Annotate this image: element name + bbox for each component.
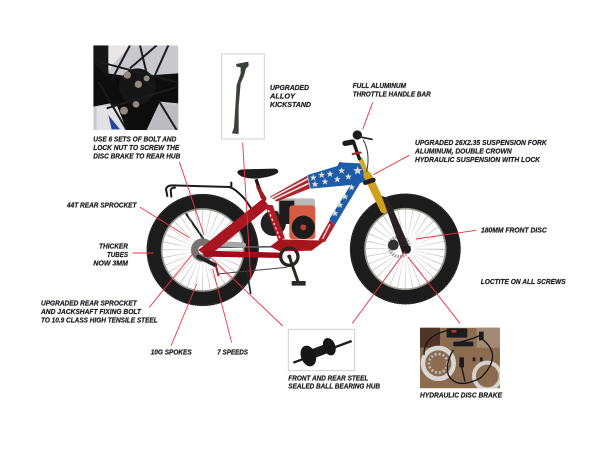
label: thicker tubes — [93, 244, 128, 268]
label: disc brake bolts: USE 6 SETS OF BOLT AND — [93, 137, 176, 144]
photo: sealed ball bearing hub — [288, 329, 355, 371]
frame — [198, 162, 367, 258]
front wheel — [351, 194, 460, 304]
label: thicker tubes: TUBES — [107, 252, 128, 259]
label: hydraulic disc brake: HYDRAULIC DISC BRAKE — [420, 393, 502, 400]
label: 180mm front disc: 180MM FRONT DISC — [481, 227, 548, 234]
label: kickstand: KICKSTAND — [270, 102, 311, 109]
photo: alloy kickstand — [222, 54, 264, 139]
label: kickstand — [269, 85, 311, 109]
label: kickstand: UPGRADED — [270, 85, 309, 92]
label: throttle handle bar — [353, 83, 431, 98]
bicycle — [147, 130, 460, 305]
label: suspension fork: ALUMINUM, DOUBLE CROWN — [414, 148, 513, 156]
label: 44T rear sprocket: 44T REAR SPROCKET — [66, 203, 137, 210]
photo: rear hub disc bolts — [93, 45, 178, 130]
flag stars — [310, 166, 362, 216]
label: throttle handle bar: FULL ALUMINUM — [353, 83, 406, 90]
seat — [237, 169, 278, 198]
label: rear sprocket and jackshaft bolt — [40, 301, 158, 324]
label: disc brake bolts: DISC BRAKE TO REAR HUB — [93, 154, 180, 160]
chain and drivetrain — [198, 243, 287, 293]
label: suspension fork: UPGRADED 26X2.35 SUSPENSION FORK — [415, 140, 548, 147]
label: rear sprocket and jackshaft bolt: AND JACKSHAFT FIXING BOLT — [40, 309, 142, 316]
photo: hydraulic disc brake kit — [420, 328, 501, 389]
handlebar — [345, 130, 372, 172]
pointer lines — [133, 102, 476, 346]
crank and pedal — [281, 248, 306, 286]
label: thicker tubes: NOW 3MM — [93, 260, 128, 268]
label: throttle handle bar: THROTTLE HANDLE BAR — [353, 92, 431, 98]
label: suspension fork — [414, 140, 548, 164]
label: rear sprocket and jackshaft bolt: UPGRADED REAR SPROCKET — [41, 301, 137, 308]
label: thicker tubes: THICKER — [99, 244, 128, 251]
label: ball bearing hub: SEALED BALL BEARING HUB — [288, 384, 380, 391]
label: 10G spokes: 10G SPOKES — [151, 349, 192, 356]
rear rack — [166, 183, 254, 241]
label: loctite: LOCTITE ON ALL SCREWS — [481, 279, 566, 286]
label: suspension fork: HYDRAULIC SUSPENSION WITH LOCK — [415, 157, 541, 164]
label: disc brake bolts — [93, 137, 180, 160]
label: rear sprocket and jackshaft bolt: TO 10.9 CLASS HIGH TENSILE STEEL — [41, 318, 158, 324]
rear wheel — [147, 195, 258, 305]
engine — [261, 198, 315, 239]
fork — [361, 159, 411, 254]
label: ball bearing hub: FRONT AND REAR STEEL — [288, 375, 368, 382]
label: ball bearing hub — [288, 375, 380, 391]
label: 7 speeds: 7 SPEEDS — [217, 349, 248, 356]
label: kickstand: ALLOY — [269, 94, 296, 100]
label: disc brake bolts: LOCK NUT TO SCREW THE — [93, 145, 180, 152]
